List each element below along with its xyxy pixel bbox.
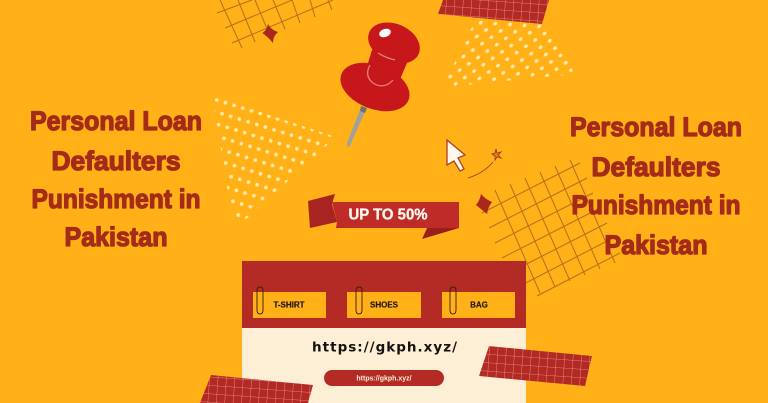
icon: push pin: [334, 15, 426, 147]
label: shoes: SHOES: [370, 300, 399, 310]
banner: up to 50%: UP TO 50%: [348, 206, 428, 224]
icon: cursor: [447, 140, 465, 171]
icon: top diamond: [262, 24, 278, 43]
title: left: Defaulters: [52, 146, 180, 176]
right grid decoration: [482, 160, 620, 296]
label: bag: BAG: [470, 300, 488, 310]
card: [242, 261, 526, 403]
icon: lower diamond: [476, 194, 492, 214]
left dotted triangle: [212, 96, 336, 222]
title: right: Defaulters: [592, 152, 720, 182]
title: right: Punishment in: [572, 190, 740, 220]
bottom right tape: [479, 346, 592, 386]
icon: paperclips: [257, 287, 456, 314]
title: right: Personal Loan: [570, 112, 742, 142]
url text: https://gkph.xyz/: [312, 340, 457, 356]
label: bag: [442, 292, 515, 318]
label: t-shirt: T-SHIRT: [273, 300, 305, 310]
banner: up to 50%: [308, 194, 459, 239]
icon: sparkle trail: [468, 149, 501, 178]
card header: [242, 261, 526, 328]
url button: https://gkph.xyz/: [356, 376, 412, 382]
title: right: [570, 112, 742, 260]
title: left: Pakistan: [64, 222, 168, 252]
bottom left tape: [200, 375, 313, 403]
label: shoes: [347, 292, 421, 318]
url button: [324, 370, 444, 386]
label: t-shirt: [253, 292, 326, 318]
card body: [242, 328, 526, 403]
title: left: Personal Loan: [30, 106, 202, 136]
top tape: [438, 0, 549, 24]
top right dotted shape: [447, 19, 575, 86]
title: left: [30, 106, 202, 252]
title: left: Punishment in: [32, 184, 200, 214]
top grid decoration: [217, 0, 333, 48]
title: right: Pakistan: [604, 230, 708, 260]
